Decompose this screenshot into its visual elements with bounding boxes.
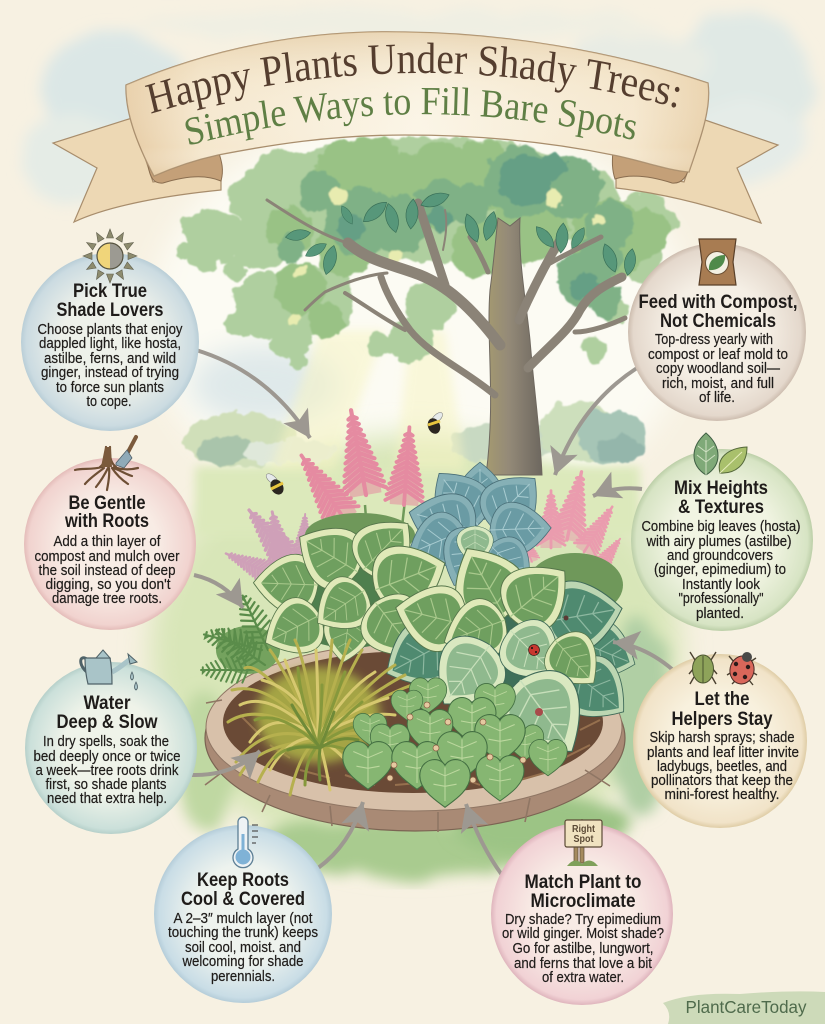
arrow: keep roots cool — [318, 802, 363, 868]
heading: Let the — [694, 688, 750, 710]
body text: rich, moist, and full — [662, 376, 774, 392]
bumblebee upper — [426, 411, 444, 436]
tree canopy — [176, 136, 680, 369]
heading: Match Plant to — [524, 871, 642, 893]
body text: (ginger, epimedium) to — [654, 562, 786, 578]
body text: dappled light, like hosta, — [39, 336, 181, 352]
panel: pick true shade lovers — [21, 229, 199, 431]
body text: compost or leaf mold to — [648, 347, 788, 363]
icon: right spot sign: Right — [572, 824, 596, 835]
body text: copy woodland soil— — [656, 361, 780, 377]
body text: perennials. — [211, 969, 275, 985]
badge: PlantCareToday: PlantCareToday — [686, 997, 807, 1017]
body text: first, so shade plants — [46, 777, 166, 793]
body text: pollinators that keep the — [651, 773, 793, 789]
heading: Cool & Covered — [181, 888, 305, 910]
body text: touching the trunk) keeps — [168, 925, 318, 941]
icon: beetle and ladybug — [689, 652, 757, 686]
body text: Add a thin layer of — [54, 534, 161, 550]
arrow: feed with compost — [555, 368, 637, 475]
body text: planted. — [696, 606, 744, 622]
epimedium groundcover — [343, 678, 567, 807]
body text: a week—tree roots drink — [36, 763, 179, 779]
ribbon main panel — [126, 32, 709, 176]
title text — [145, 42, 680, 144]
heading: Be Gentle — [68, 492, 146, 514]
body text: compost and mulch over — [34, 549, 180, 565]
body text: need that extra help. — [47, 791, 167, 807]
panel: feed with compost — [628, 239, 806, 421]
green hosta left — [252, 503, 457, 675]
body text: Top-dress yearly with — [655, 332, 773, 348]
body text: "professionally" — [678, 591, 764, 607]
body text: Go for astilbe, lungwort, — [512, 941, 654, 957]
body text: soil cool, moist. and — [185, 940, 301, 956]
body text: and groundcovers — [667, 548, 773, 564]
body text: of extra water. — [542, 970, 624, 986]
tree trunk and branches — [267, 200, 625, 475]
distant shrubs — [185, 402, 646, 467]
icon: thermometer — [233, 817, 258, 868]
body text: the soil instead of deep — [38, 563, 176, 579]
heading: with Roots — [64, 510, 149, 532]
body text: ginger, instead of trying — [41, 365, 179, 381]
heading — [181, 869, 305, 910]
ribbon curl right — [612, 150, 689, 183]
body text: Combine big leaves (hosta) — [642, 519, 800, 535]
body text — [647, 730, 799, 803]
body text: or wild ginger. Moist shade? — [502, 926, 664, 942]
body text: In dry spells, soak the — [43, 734, 169, 750]
heading — [674, 477, 768, 518]
body text: plants and leaf litter invite — [647, 745, 799, 761]
bumblebee lower — [264, 472, 286, 497]
title banner ribbon — [52, 31, 780, 224]
body text — [168, 911, 318, 985]
body text: with airy plumes (astilbe) — [646, 534, 792, 550]
heading: Deep & Slow — [56, 711, 158, 733]
panel: mix heights and textures — [631, 433, 813, 631]
body text — [34, 534, 180, 607]
pale blue haze — [190, 345, 340, 425]
green hosta right — [371, 531, 646, 776]
heading: Not Chemicals — [660, 310, 776, 332]
heading — [56, 280, 164, 321]
icon: right spot sign — [565, 819, 602, 866]
body text: digging, so you don't — [46, 577, 170, 593]
title line 2: Simple Ways to Fill Bare Spots — [186, 87, 636, 144]
sedge grass — [228, 640, 412, 795]
arrow: be gentle with roots — [194, 575, 243, 608]
ribbon tail right — [616, 120, 778, 223]
body text: A 2–3″ mulch layer (not — [174, 911, 312, 927]
icon: half sun — [83, 229, 137, 283]
pale glow behind tree — [150, 110, 690, 530]
heading: Water — [84, 692, 131, 714]
body text: mini-forest healthy. — [664, 787, 780, 803]
sky watercolor washes — [20, 9, 812, 205]
icon: compost bag — [699, 239, 736, 285]
astilbe plumes back — [220, 404, 629, 617]
body text: welcoming for shade — [182, 954, 304, 970]
panel: keep roots cool and covered — [154, 817, 332, 1003]
icon: right spot sign: Spot — [574, 834, 594, 845]
heading: Keep Roots — [197, 869, 289, 891]
heading: Feed with Compost, — [638, 291, 798, 313]
lawn — [150, 435, 680, 878]
ladybugs on leaves — [528, 616, 568, 716]
fern — [200, 590, 281, 683]
heading: Microclimate — [530, 890, 636, 912]
arrow: pick true shade lovers — [196, 350, 310, 438]
heading: & Textures — [678, 496, 764, 518]
icon: two leaves — [694, 433, 747, 476]
body text: astilbe, ferns, and wild — [44, 351, 176, 367]
body text: ladybugs, beetles, and — [657, 759, 787, 775]
body text: Instantly look — [682, 577, 761, 593]
body text: Choose plants that enjoy — [38, 322, 183, 338]
heading — [64, 492, 149, 532]
mulch — [223, 651, 603, 793]
heading — [524, 871, 642, 912]
heading — [638, 291, 798, 332]
body text: bed deeply once or twice — [34, 749, 180, 765]
arrow: let the helpers stay — [613, 642, 673, 670]
icon: watering can — [81, 650, 138, 690]
body text — [642, 519, 800, 622]
body text: Skip harsh sprays; shade — [650, 730, 794, 746]
panel: match plant to microclimate — [491, 819, 673, 1005]
body text: Dry shade? Try epimedium — [505, 912, 661, 928]
panel: be gentle with roots — [24, 437, 196, 630]
arrow: match plant to microclimate — [466, 804, 502, 875]
blue hosta — [398, 456, 555, 600]
body text: of life. — [699, 390, 735, 406]
icon: roots and trowel — [75, 437, 138, 490]
body text — [38, 322, 183, 410]
heading: Pick True — [73, 280, 147, 302]
body text: to force sun plants — [56, 380, 164, 396]
dark foreground leaves — [285, 189, 638, 276]
body text: damage tree roots. — [52, 591, 162, 607]
body text — [648, 332, 788, 406]
heading: Mix Heights — [674, 477, 768, 499]
heading — [672, 688, 773, 730]
badge: PlantCareToday — [663, 991, 825, 1024]
ribbon tail left — [53, 118, 221, 222]
panel: let the helpers stay — [633, 652, 807, 828]
heading — [56, 692, 158, 733]
ribbon curl left — [148, 150, 222, 183]
garden ring edging — [205, 643, 625, 832]
arrow: water deep and slow — [192, 751, 260, 775]
heading: Helpers Stay — [672, 708, 773, 730]
sun rays — [270, 330, 465, 470]
body text: and ferns that love a bit — [514, 956, 652, 972]
title line 1: Happy Plants Under Shady Trees: — [145, 42, 680, 114]
body text: to cope. — [86, 394, 132, 410]
panel: water deep and slow — [25, 650, 197, 834]
heading: Shade Lovers — [56, 299, 164, 321]
body text — [34, 734, 180, 807]
body text — [502, 912, 664, 986]
arrow: mix heights — [593, 488, 642, 496]
